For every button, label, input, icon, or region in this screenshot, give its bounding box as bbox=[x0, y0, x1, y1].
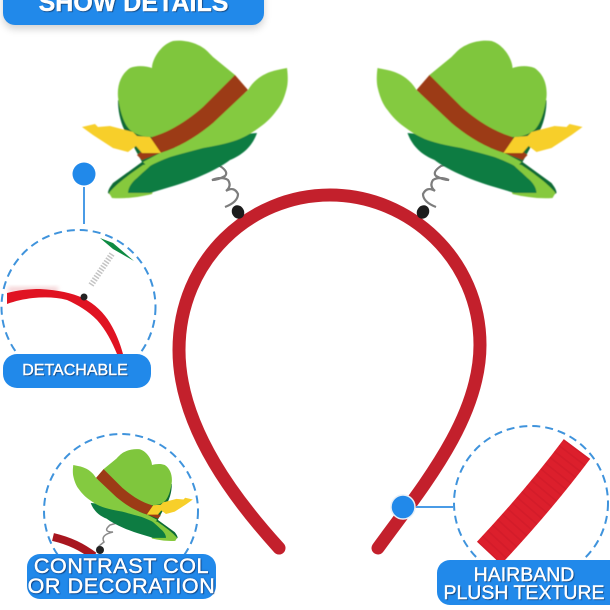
label: detachable bbox=[3, 354, 151, 388]
label: detachable: DETACHABLE bbox=[22, 362, 128, 379]
label: hairband texture: PLUSH TEXTURE bbox=[443, 582, 605, 604]
label: hairband texture bbox=[437, 560, 610, 605]
label: hairband texture: HAIRBAND bbox=[474, 564, 574, 586]
headband bbox=[179, 195, 480, 548]
detail circle: hairband texture bbox=[454, 426, 608, 580]
marker: detachable bbox=[72, 162, 96, 224]
right hat bbox=[377, 41, 582, 221]
detail circle: contrast decoration bbox=[44, 434, 198, 588]
label: contrast colour: CONTRAST COL bbox=[34, 554, 209, 578]
label: contrast colour bbox=[27, 554, 216, 599]
heading: show details bbox=[3, 0, 264, 25]
detail circle: detachable bbox=[2, 230, 156, 384]
left hat bbox=[82, 41, 288, 221]
marker: hairband bbox=[391, 495, 453, 519]
label: contrast colour: OR DECORATION bbox=[28, 574, 215, 598]
